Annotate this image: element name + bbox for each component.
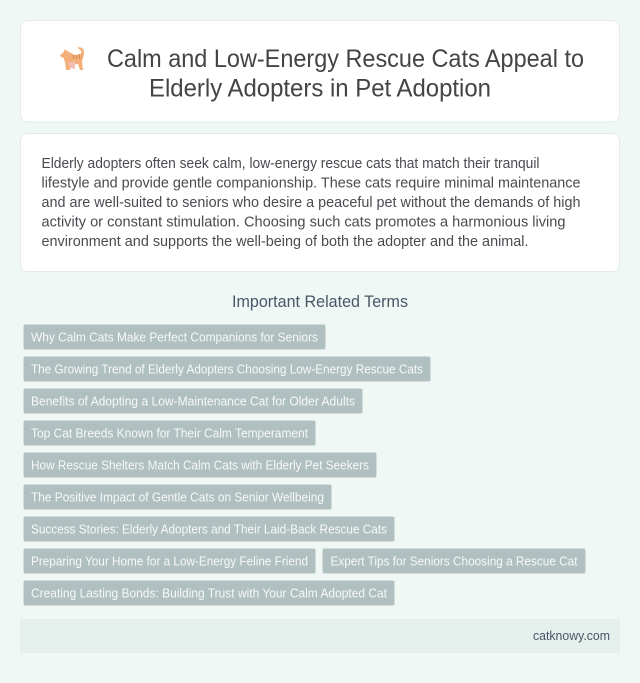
description text: and are well-suited to seniors who desire a peaceful pet without the demands of high	[42, 194, 580, 211]
description text: environment and supports the well-being of both the adopter and the animal.	[42, 233, 528, 250]
title text	[107, 45, 584, 102]
tag 3	[24, 388, 362, 414]
footer bar	[20, 619, 620, 653]
tag 5: How Rescue Shelters Match Calm Cats with Elderly Pet Seekers	[31, 458, 369, 472]
tag 1	[24, 324, 326, 350]
description text: activity or constant stimulation. Choosing such cats promotes a harmonious living	[42, 214, 566, 230]
tag 2: The Growing Trend of Elderly Adopters Choosing Low-Energy Rescue Cats	[31, 362, 423, 376]
tag 7	[24, 516, 394, 542]
tag 8: Preparing Your Home for a Low-Energy Feline Friend	[31, 554, 308, 568]
tag 6: The Positive Impact of Gentle Cats on Senior Wellbeing	[31, 490, 324, 504]
tag 9	[322, 548, 586, 574]
tag 10: Creating Lasting Bonds: Building Trust with Your Calm Adopted Cat	[31, 586, 387, 600]
tag 1: Why Calm Cats Make Perfect Companions for Seniors	[31, 330, 318, 344]
tag 10	[24, 580, 394, 606]
description text	[42, 155, 580, 250]
tag 4: Top Cat Breeds Known for Their Calm Temperament	[31, 426, 308, 440]
heading: important related terms: Important Related Terms	[232, 293, 408, 311]
icon: cat	[60, 47, 84, 70]
panel: description	[20, 134, 620, 272]
tag 3: Benefits of Adopting a Low-Maintenance Cat for Older Adults	[31, 394, 355, 408]
title text: Calm and Low-Energy Rescue Cats Appeal to	[107, 45, 584, 73]
tag 4	[24, 420, 316, 446]
tag 2	[24, 356, 430, 382]
description text: Elderly adopters often seek calm, low-energy rescue cats that match their tranquil	[42, 155, 540, 172]
tag 6	[24, 484, 332, 510]
tag 8	[24, 548, 316, 574]
title text: Elderly Adopters in Pet Adoption	[149, 74, 491, 102]
tag list	[24, 324, 586, 606]
description text: lifestyle and provide gentle companionship. These cats require minimal maintenance	[42, 174, 580, 192]
tag 5	[24, 452, 376, 478]
tag 7: Success Stories: Elderly Adopters and Their Laid-Back Rescue Cats	[31, 522, 387, 536]
tag 9: Expert Tips for Seniors Choosing a Rescue Cat	[330, 554, 578, 568]
footer text: catknowy.com	[533, 628, 610, 643]
panel: title card	[20, 20, 620, 122]
